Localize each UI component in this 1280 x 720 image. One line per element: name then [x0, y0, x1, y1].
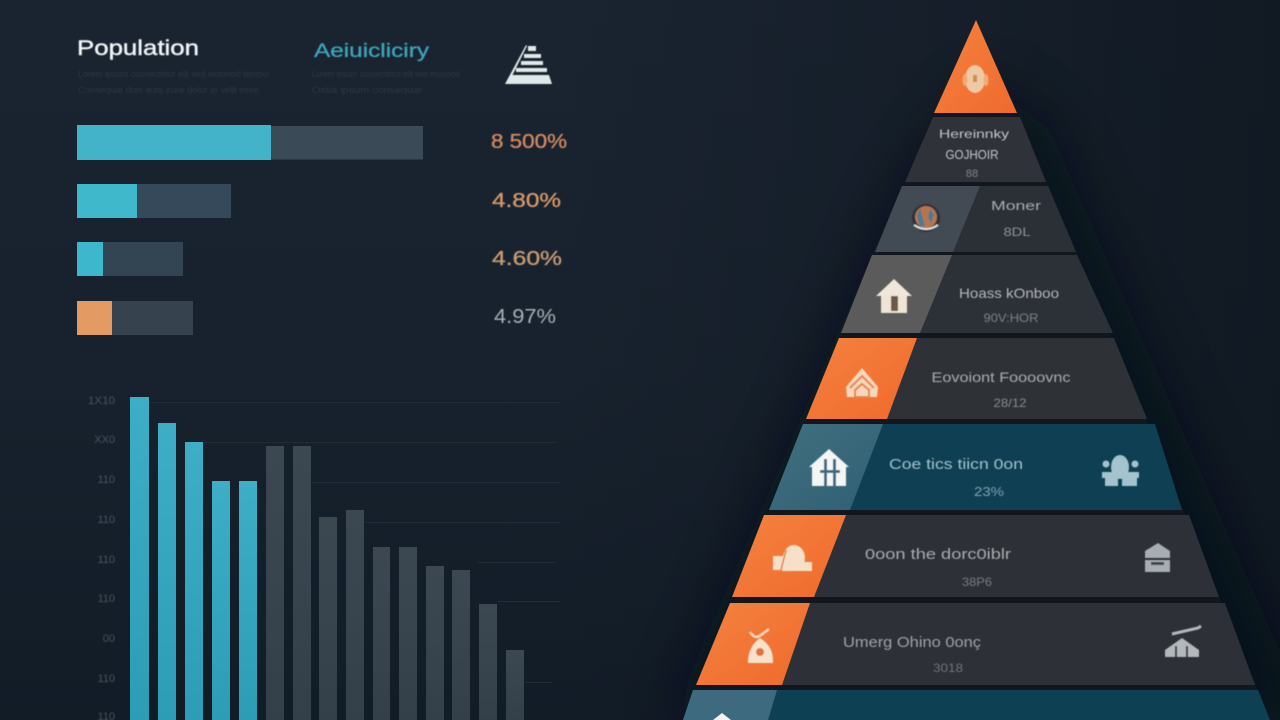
icon: bag	[748, 629, 773, 663]
y axis labels: 110	[97, 554, 115, 566]
gray columns	[266, 446, 524, 720]
icon: head	[962, 65, 988, 93]
tier 5: Eovoiont Foooovnc	[932, 369, 1070, 385]
bar row 2	[77, 184, 231, 218]
y axis labels: 1X10	[88, 395, 115, 407]
tier 7	[732, 515, 1219, 597]
bar row 3	[77, 242, 183, 276]
icon: house top	[713, 713, 731, 720]
tier 5	[806, 338, 1147, 419]
tier 7: 38P6	[962, 575, 992, 589]
y axis labels: 110	[97, 673, 115, 685]
tier 9	[683, 690, 1270, 720]
text block: secondary description	[312, 69, 460, 95]
tier 6: 23%	[974, 484, 1004, 499]
y axis labels: 00	[103, 633, 115, 645]
text block: population description	[78, 69, 270, 95]
pyramid	[683, 20, 1270, 720]
icon: globe	[912, 204, 940, 232]
icon: house	[876, 279, 912, 313]
y axis labels	[88, 395, 115, 720]
y axis labels: 110	[97, 593, 115, 605]
tier 8: 3018	[933, 661, 963, 675]
tier 2: Hereinnky	[939, 127, 1009, 141]
tier 3	[875, 186, 1076, 252]
value 2: 4.80%	[492, 190, 561, 212]
text block: population description: Consequat duis aute irure dolor in velit esse	[78, 85, 259, 95]
value 1: 8 500%	[491, 131, 567, 153]
tier 4: Hoass kOnboo	[959, 285, 1059, 301]
icon: hut right	[1145, 543, 1170, 572]
tier 2	[905, 117, 1046, 182]
tier 3: Moner	[991, 198, 1042, 213]
tier 2: GOJHOIR	[946, 147, 998, 162]
text block: secondary description: Lorem ipsum consectetur elit sed eiusmod	[312, 69, 460, 79]
icon: hut	[846, 368, 878, 397]
tier 1: apex	[934, 20, 1017, 113]
value 4: 4.97%	[494, 306, 556, 328]
icon: small pyramid	[505, 45, 552, 84]
tier 2: 88	[966, 168, 978, 180]
text block: secondary description: Ostia ipsum consequat	[312, 85, 423, 95]
column chart	[88, 395, 560, 720]
tier 4: 90V:HOR	[984, 311, 1039, 325]
horizontal bar chart	[77, 125, 567, 335]
tier 7: 0oon the dorc0iblr	[865, 546, 1011, 563]
y axis labels: 110	[97, 474, 115, 486]
y axis labels: 110	[97, 514, 115, 526]
heading: Aeiuicliciry: Aeiuicliciry	[314, 41, 430, 62]
bar row 1	[77, 125, 423, 160]
text block: population description: Lorem ipsum consectetur elit sed eiusmod tempor	[78, 69, 270, 79]
tier 6	[769, 424, 1182, 510]
value 3: 4.60%	[492, 248, 562, 270]
icon: building right	[1102, 455, 1139, 486]
y axis labels: XX0	[94, 434, 115, 446]
tier 6: Coe tics tiicn 0on	[889, 456, 1023, 473]
heading: Population: Population	[77, 37, 199, 60]
tier 8	[696, 603, 1255, 685]
icon: cluster	[773, 545, 812, 571]
tier 3: 8DL	[1004, 225, 1031, 239]
icon: house white	[809, 449, 849, 486]
tier 5: 28/12	[994, 396, 1027, 410]
tier 8: Umerg Ohino 0onç	[843, 634, 982, 651]
teal columns	[130, 397, 257, 720]
tier 4	[841, 255, 1113, 333]
icon: roof with arrow	[1165, 626, 1201, 657]
bar row 4	[77, 301, 193, 335]
